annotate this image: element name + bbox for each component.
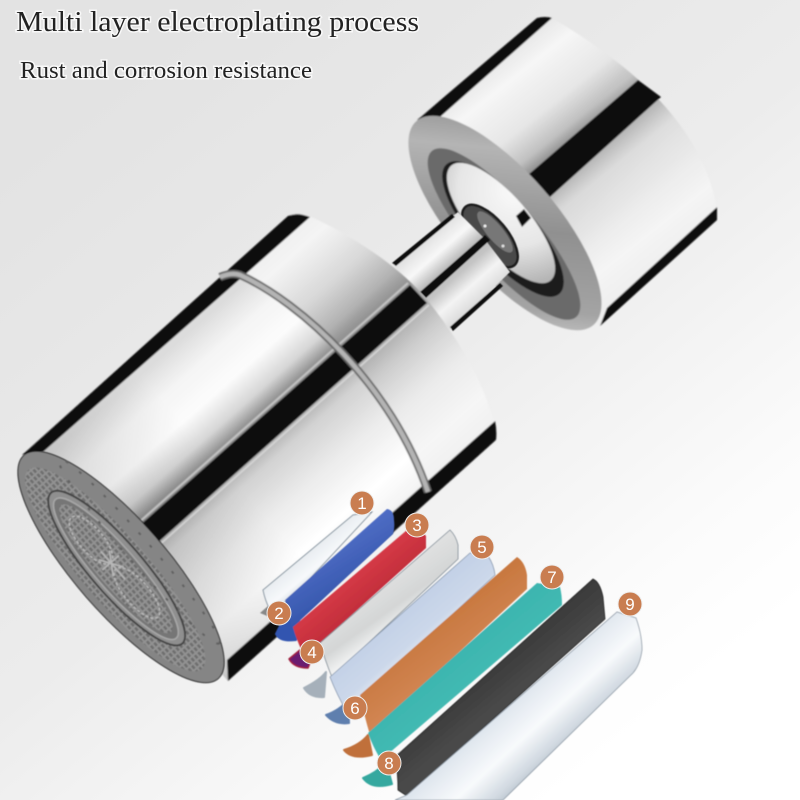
layer 3 red xyxy=(289,530,426,668)
stem xyxy=(392,212,510,331)
upper chrome cylinder xyxy=(378,17,717,358)
badge 3: 3 xyxy=(412,516,422,535)
nozzle joint xyxy=(453,196,527,276)
subtitle: Rust and corrosion resistance xyxy=(20,58,312,84)
layer 9 white xyxy=(395,612,642,800)
badge 8: 8 xyxy=(384,754,394,773)
badge 7: 7 xyxy=(547,568,557,587)
inner mesh xyxy=(47,494,185,644)
layer 4 grey xyxy=(304,530,458,697)
rear section behind groove xyxy=(238,214,496,490)
bottom edge band xyxy=(227,421,496,681)
mesh ring xyxy=(4,448,227,691)
badge 3 xyxy=(405,513,429,537)
lower chrome cylinder xyxy=(22,214,496,681)
badge 9: 9 xyxy=(625,595,635,614)
centre reflection stripe xyxy=(138,285,427,545)
layer strips xyxy=(260,509,642,800)
layer 2 blue xyxy=(276,509,394,640)
upper cylinder front rim xyxy=(378,88,632,358)
top edge band xyxy=(22,214,310,455)
layer 8 black xyxy=(395,579,605,796)
badge 6 xyxy=(343,696,367,720)
badge 1 xyxy=(350,491,374,515)
badge 2: 2 xyxy=(274,604,284,623)
upper cylinder inner recess xyxy=(407,129,601,339)
layer 7 teal xyxy=(363,583,562,786)
aerator face xyxy=(0,425,253,709)
title: Multi layer electroplating process xyxy=(16,7,419,38)
number badges xyxy=(267,491,642,775)
groove ring xyxy=(220,274,428,492)
badge 8 xyxy=(377,751,401,775)
badge 5 xyxy=(470,535,494,559)
layer 1 white xyxy=(260,512,372,618)
badge 7 xyxy=(540,565,564,589)
rim dots xyxy=(50,451,228,651)
badge 9 xyxy=(618,592,642,616)
layer 5 periwinkle xyxy=(326,553,495,723)
spray plate rosette xyxy=(62,510,167,625)
inner collar xyxy=(31,476,202,661)
badge 5: 5 xyxy=(477,538,487,557)
badge 2 xyxy=(267,601,291,625)
layer 6 orange xyxy=(344,557,527,757)
badge 6: 6 xyxy=(350,699,360,718)
badge 4: 4 xyxy=(307,643,317,662)
badge 1: 1 xyxy=(357,494,367,513)
badge 4 xyxy=(300,640,324,664)
